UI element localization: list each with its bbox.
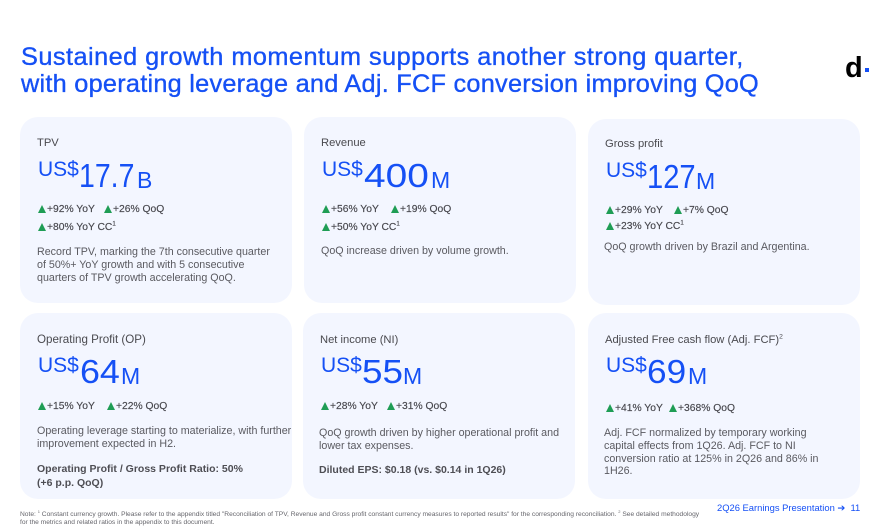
value: Operating Profit	[38, 354, 140, 391]
value: TPV: 17.7	[79, 158, 134, 195]
growth: Operating Profit YoY: +15% YoY	[47, 401, 95, 412]
growth: Revenue CC: +50% YoY CC1	[331, 221, 400, 233]
panel: Revenue	[304, 117, 576, 303]
label: Net income: Net income (NI)	[320, 334, 398, 346]
description: Net income	[319, 427, 559, 452]
growth: Adjusted FCF QoQ: +368% QoQ	[678, 403, 735, 414]
value: Operating Profit: 64	[80, 354, 120, 391]
description: TPV: Record TPV, marking the 7th consecutive quarter	[37, 246, 270, 258]
footnote: Note: 1 Constant currency growth. Please refer to the appendix titled "Reconciliation of TPV, Revenue and Gross profit constant currency measures to reported results" for the corresponding reconciliation. 2 See detailed methodology	[20, 509, 699, 518]
growth: TPV QoQ: +26% QoQ	[113, 204, 164, 215]
footnote	[20, 509, 699, 526]
value: Operating Profit: M	[121, 363, 140, 389]
EPS: Diluted EPS: $0.18 (vs. $0.14 in 1Q26)	[319, 464, 506, 476]
growth: Operating Profit QoQ: +22% QoQ	[116, 401, 167, 412]
growth: TPV CC: +80% YoY CC1	[47, 221, 116, 233]
description: Operating Profit	[37, 425, 291, 450]
value: Gross profit: M	[696, 168, 715, 194]
title: Sustained growth momentum supports another strong quarter,	[21, 43, 744, 71]
value: TPV	[38, 158, 152, 195]
value: TPV: B	[137, 167, 152, 193]
label: Adjusted FCF: Adjusted Free cash flow (Adj. FCF)2	[605, 333, 783, 346]
ratio: Operating Profit: (+6 p.p. QoQ)	[37, 476, 103, 488]
panel: TPV	[20, 117, 292, 303]
description: Revenue: QoQ increase driven by volume growth.	[321, 245, 509, 257]
growth: Gross profit CC: +23% YoY CC1	[615, 220, 684, 232]
value: Adjusted FCF	[606, 354, 707, 391]
description: Operating Profit: Operating leverage starting to materialize, with further	[37, 425, 291, 437]
description: Net income: lower tax expenses.	[319, 440, 413, 452]
value: Net income: 55	[362, 354, 403, 391]
description: Gross profit: QoQ growth driven by Brazil and Argentina.	[604, 241, 810, 253]
growth: Net income QoQ: +31% QoQ	[396, 401, 447, 412]
value: Revenue	[322, 158, 450, 195]
description: Adjusted FCF: capital effects from 1Q26. Adj. FCF to NI	[604, 440, 796, 452]
panel: Operating Profit	[20, 313, 292, 499]
description: Adjusted FCF: Adj. FCF normalized by temporary working	[604, 427, 807, 439]
logo: d	[845, 52, 863, 84]
growth: Gross profit QoQ: +7% QoQ	[683, 205, 729, 216]
value: Gross profit: US$	[606, 159, 647, 182]
value: Gross profit: 127	[647, 159, 696, 196]
growth: Adjusted FCF YoY: +41% YoY	[615, 403, 663, 414]
description: Net income: QoQ growth driven by higher operational profit and	[319, 427, 559, 439]
description: TPV	[37, 246, 270, 284]
panel: Adjusted FCF	[588, 313, 860, 499]
ratio: Operating Profit	[37, 463, 243, 488]
growth: TPV YoY: +92% YoY	[47, 204, 95, 215]
description: Adjusted FCF: 1H26.	[604, 465, 633, 477]
label: TPV: TPV	[37, 137, 59, 149]
value: Gross profit	[606, 159, 715, 196]
label: Operating Profit: Operating Profit (OP)	[37, 333, 146, 346]
label: Gross profit: Gross profit	[605, 138, 663, 150]
value: Adjusted FCF: 69	[647, 354, 686, 391]
description: TPV: of 50%+ YoY growth and with 5 consecutive	[37, 259, 244, 271]
value: Net income: M	[403, 363, 422, 389]
description: Adjusted FCF: conversion ratio at 125% in 2Q26 and 86% in	[604, 453, 818, 465]
page reference: 2Q26 Earnings Presentation ➔ 11	[717, 502, 860, 513]
description: TPV: quarters of TPV growth accelerating QoQ.	[37, 272, 236, 284]
value: Net income: US$	[321, 354, 362, 377]
value: Net income	[321, 354, 422, 391]
panel: Net income	[303, 313, 575, 499]
growth: Gross profit YoY: +29% YoY	[615, 205, 663, 216]
footnote: for the metrics and related ratios in the appendix to this document.	[20, 519, 215, 526]
label: Revenue: Revenue	[321, 137, 366, 149]
title	[20, 43, 759, 98]
description: Operating Profit: improvement expected in H2.	[37, 438, 176, 450]
growth: Revenue QoQ: +19% QoQ	[400, 204, 451, 215]
panel: Gross profit	[588, 119, 860, 305]
value: Revenue: US$	[322, 158, 363, 181]
value: Revenue: 400	[364, 158, 429, 195]
value: TPV: US$	[38, 158, 79, 181]
value: Adjusted FCF: US$	[606, 354, 647, 377]
ratio: Operating Profit: Operating Profit / Gross Profit Ratio: 50%	[37, 463, 243, 475]
value: Operating Profit: US$	[38, 354, 79, 377]
growth: Revenue YoY: +56% YoY	[331, 204, 379, 215]
growth: Net income YoY: +28% YoY	[330, 401, 378, 412]
value: Revenue: M	[431, 167, 450, 193]
title: with operating leverage and Adj. FCF conversion improving QoQ	[21, 70, 759, 98]
value: Adjusted FCF: M	[688, 363, 707, 389]
description: Adjusted FCF	[604, 427, 818, 477]
